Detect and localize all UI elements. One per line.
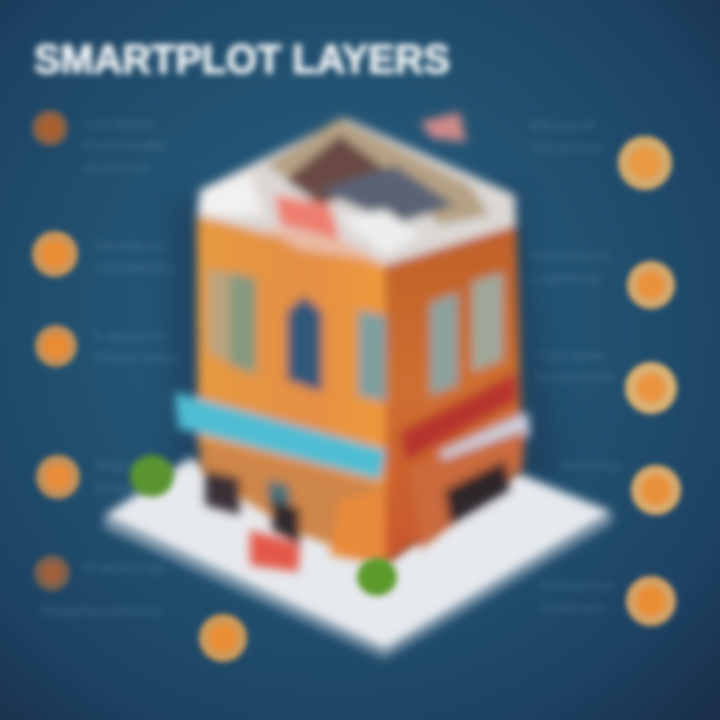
badge 2 <box>32 231 78 277</box>
badge 8 <box>627 261 675 309</box>
badge 7 <box>618 136 672 190</box>
left text blocks: Access <box>84 160 150 175</box>
left icon badges <box>32 110 247 662</box>
left text blocks: Foot traffic <box>84 138 170 153</box>
plant right <box>357 558 397 596</box>
right text blocks: Facade <box>535 348 605 363</box>
right text blocks: Entrance <box>540 578 615 593</box>
badge 9 <box>625 362 677 414</box>
right windows <box>430 272 503 396</box>
left storefront <box>200 440 385 572</box>
badge 4 <box>36 455 80 499</box>
right icon badges <box>618 136 681 626</box>
badge 3 <box>35 325 77 367</box>
cyan awning <box>175 392 386 480</box>
right text blocks: Customers <box>540 600 606 615</box>
right text blocks: Structure <box>530 140 605 155</box>
badge 6 <box>199 614 247 662</box>
left text blocks: Signage <box>94 458 164 473</box>
right storefront <box>412 430 525 550</box>
right text blocks: Materials <box>535 370 616 385</box>
badge 1 <box>32 110 68 146</box>
left text blocks: Display <box>94 480 155 495</box>
right text blocks <box>530 118 620 615</box>
right text blocks: Roof <box>530 118 596 133</box>
left text blocks: Location <box>84 116 154 131</box>
title: SMARTPLOT LAYERS <box>34 36 450 82</box>
left text blocks <box>40 116 179 618</box>
left text blocks: Parking <box>84 560 164 575</box>
base plate <box>104 458 612 658</box>
badge 10 <box>631 465 681 515</box>
building shadow <box>170 190 560 600</box>
left text blocks: Floor plan <box>94 350 179 365</box>
left text blocks: Layout <box>94 328 165 343</box>
left text blocks: Visibility <box>94 260 175 275</box>
white band, right wall <box>440 412 530 474</box>
red band, right wall <box>400 372 518 462</box>
left windows <box>208 268 386 402</box>
left text blocks: Neighbourhood <box>40 603 160 618</box>
left text blocks: Storefront <box>94 238 164 253</box>
badge 11 <box>626 576 676 626</box>
right text blocks: Awning <box>560 458 620 473</box>
left wall <box>197 215 385 565</box>
right wall <box>385 215 522 565</box>
right text blocks: Windows <box>530 248 611 263</box>
badge 5 <box>34 555 70 591</box>
roof <box>197 112 516 265</box>
right text blocks: Lighting <box>530 270 600 285</box>
building <box>175 112 530 572</box>
plant left <box>130 455 174 497</box>
